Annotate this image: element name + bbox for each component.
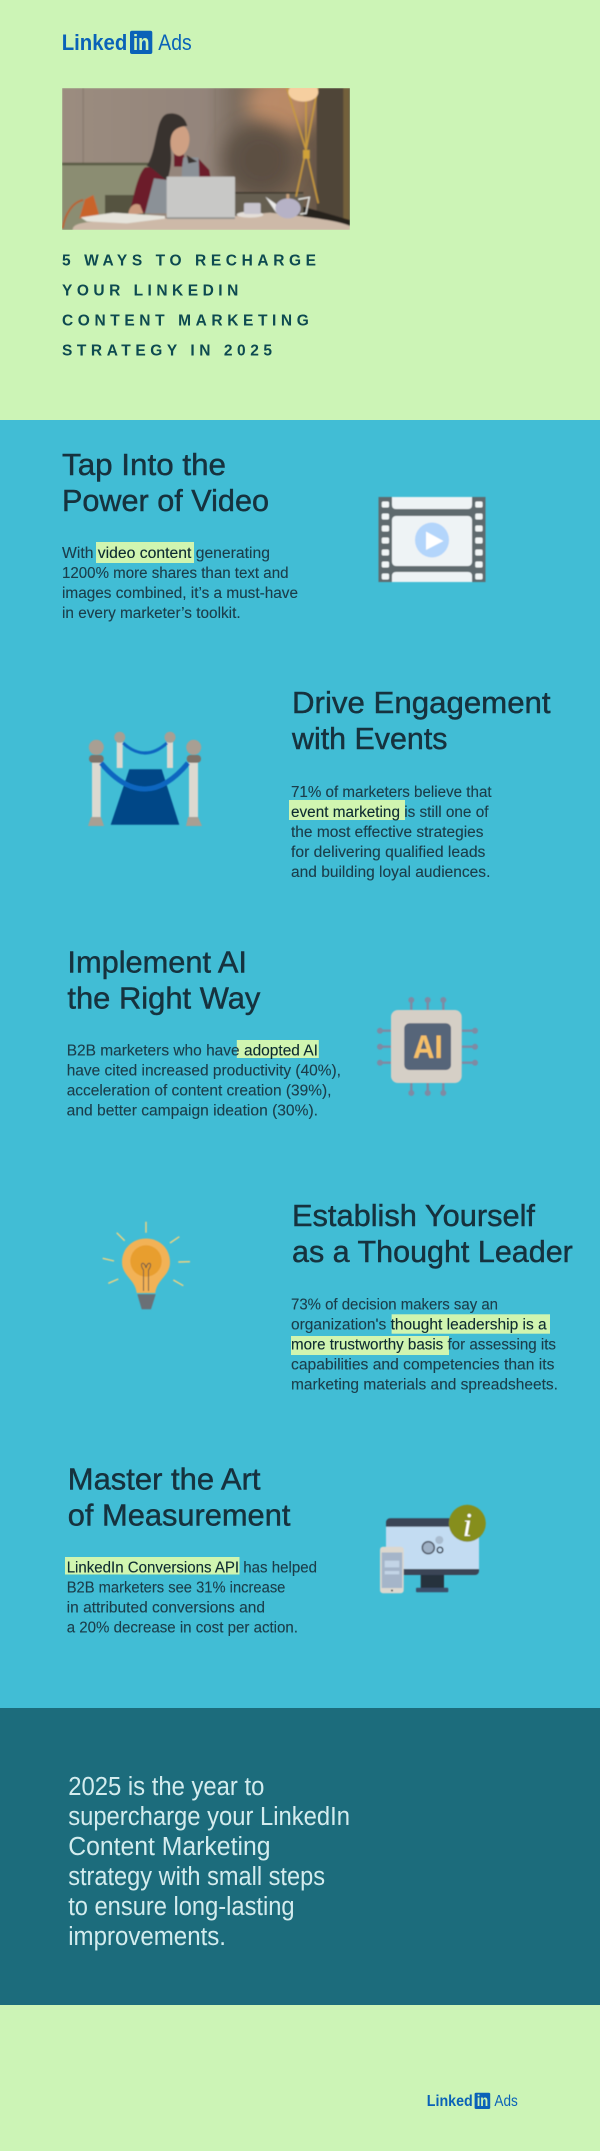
body text: video content: images combined, it’s a must-have [62,585,298,602]
body text: conversions API: a 20% decrease in cost per action. [67,1619,298,1636]
heading: Tap Into the Power of Video: Power of Video [62,484,269,518]
body text: video content: With video content generating [62,545,270,562]
body text: conversions API: LinkedIn Conversions API has helped [67,1559,317,1576]
title: 5 ways to recharge [62,252,316,359]
body text: video content: 1200% more shares than text and [62,565,288,582]
logo: LinkedIn Ads: Linked [62,30,127,55]
section 3: AI [67,946,477,1120]
heading: Drive Engagement with Events: with Events [291,722,448,756]
section 2: events [88,686,551,881]
heading: Implement AI the Right Way: the Right Way [67,982,261,1016]
body text: adopted AI: acceleration of content creation (39%), [67,1083,331,1100]
closing statement text: strategy with small steps [68,1863,325,1891]
title: 5 ways to recharge: YOUR LINKEDIN [62,282,238,299]
logo: LinkedIn Ads: in [133,30,150,55]
heading: Tap Into the Power of Video: Tap Into the [62,448,226,482]
heading: Tap Into the Power of Video [62,448,269,518]
closing statement text: Content Marketing [68,1833,270,1861]
body text: event marketing [289,784,492,881]
body text: adopted AI: have cited increased productivity (40%), [67,1063,341,1080]
closing statement text: supercharge your LinkedIn [68,1803,350,1831]
heading: Implement AI the Right Way: Implement AI [67,946,247,980]
title: 5 ways to recharge: STRATEGY IN 2025 [62,342,272,359]
body text: event marketing: for delivering qualified leads [291,844,486,861]
logo: LinkedIn Ads [62,30,192,55]
body text: conversions API: in attributed conversions and [67,1599,265,1616]
body text: thought leadership: marketing materials and spreadsheets. [291,1376,558,1393]
body text: thought leadership [291,1296,558,1393]
body text: thought leadership: more trustworthy basis for assessing its [291,1336,556,1353]
icon: AI chip: AI [413,1029,443,1065]
body text: adopted AI: B2B marketers who have adopted AI [67,1043,318,1060]
body text: adopted AI [67,1040,341,1120]
heading: Drive Engagement with Events: Drive Engagement [292,686,551,720]
heading: Master the Art of Measurement [68,1462,291,1532]
body text: thought leadership: organization's thought leadership is a [291,1316,547,1333]
body text: video content [62,542,298,622]
heading: Master the Art of Measurement: of Measurement [68,1498,291,1532]
body text: event marketing: and building loyal audiences. [291,864,490,881]
body text: thought leadership: 73% of decision makers say an [291,1296,498,1313]
closing statement text: to ensure long-lasting [68,1893,295,1921]
icon: monitor, phone and info badge [380,1505,486,1593]
title: 5 ways to recharge: CONTENT MARKETING [62,312,309,329]
icon: AI chip [378,998,477,1095]
footer logo: LinkedIn Ads: in [477,2093,488,2110]
icon: light bulb [103,1222,190,1309]
logo: LinkedIn Ads: Ads [158,30,192,55]
body text: event marketing: the most effective strategies [291,824,484,841]
top header panel [0,0,600,420]
footer logo: LinkedIn Ads [427,2093,518,2110]
body text: conversions API: B2B marketers see 31% increase [67,1579,285,1596]
footer panel [0,2005,600,2151]
closing statement text [68,1773,350,1951]
heading: Establish Yourself as a Thought Leader: Establish Yourself [292,1199,536,1233]
footer logo: LinkedIn Ads: Linked [427,2093,473,2110]
title: 5 ways to recharge: 5 WAYS TO RECHARGE [62,252,316,269]
heading: Drive Engagement with Events [291,686,551,756]
body text: thought leadership: capabilities and competencies than its [291,1356,555,1373]
heading: Master the Art of Measurement: Master the Art [68,1462,261,1496]
icon: film strip with play button [378,497,486,582]
icon: red carpet with rope barriers [88,732,202,826]
heading: Implement AI the Right Way [67,946,261,1016]
body text: conversions API [65,1557,317,1636]
icon: monitor, phone and info badge: i [463,1507,472,1544]
closing panel [0,1708,600,2005]
body text: adopted AI: and better campaign ideation (30%). [67,1103,318,1120]
body text: video content: in every marketer’s toolkit. [62,605,241,622]
photo: woman working on laptop at a table [62,73,350,230]
body text: event marketing: event marketing is still one of [291,804,489,821]
closing statement text: improvements. [68,1923,226,1951]
section 1: video [62,448,486,622]
body text: event marketing: 71% of marketers believe that [291,784,492,801]
main panel: five strategies background [0,420,600,1708]
heading: Establish Yourself as a Thought Leader [292,1199,573,1269]
section 4: thought leadership [103,1199,573,1393]
section 5: measurement [65,1462,486,1636]
footer logo: LinkedIn Ads: Ads [494,2093,518,2110]
closing statement text: 2025 is the year to [68,1773,264,1801]
heading: Establish Yourself as a Thought Leader: as a Thought Leader [292,1235,573,1269]
